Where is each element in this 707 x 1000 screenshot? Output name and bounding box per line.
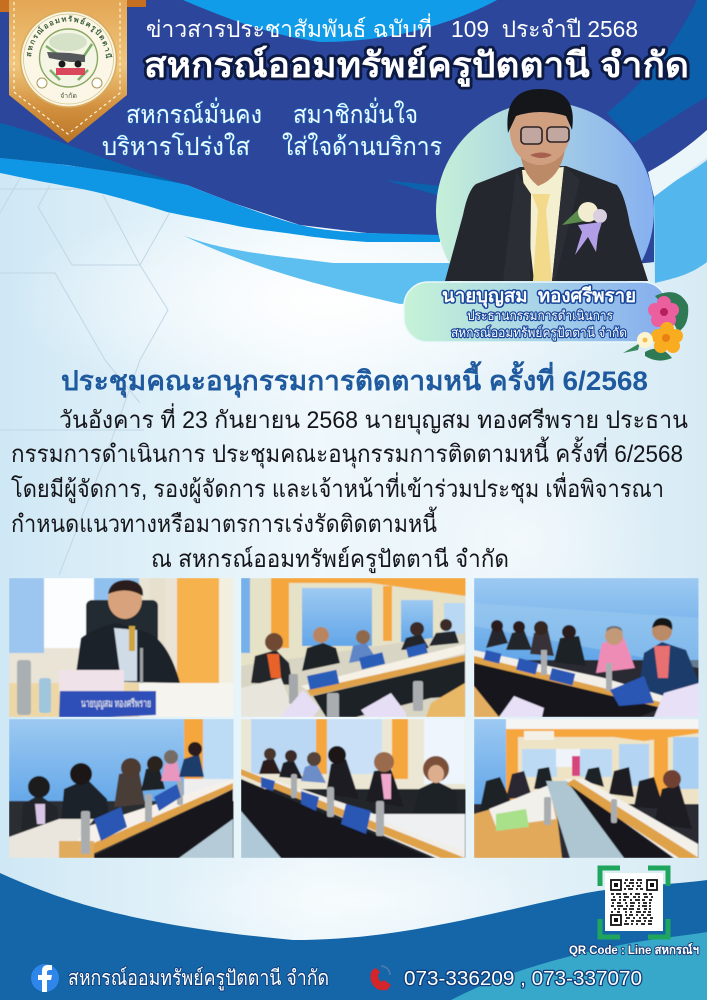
logo ring text: สหกรณ์ออมทรัพย์ครูปัตตานี [26, 15, 112, 58]
wave: right white swoosh [648, 130, 707, 197]
photo: wide view of meeting room [474, 719, 699, 858]
chairman position: ประธานกรรมการดำเนินการ [467, 308, 613, 323]
wave: teal footer corner [451, 932, 707, 1000]
photo: staff along the table [9, 719, 234, 858]
decorative hexagon lines [0, 178, 170, 575]
slogans: สหกรณ์มั่นคง [126, 97, 262, 129]
QR code [600, 868, 668, 937]
newsletter issue line: ข่าวสารประชาสัมพันธ์ ฉบับที่ 109 ประจำปี 2568 [146, 13, 638, 42]
wave: small dark accent behind portrait [385, 180, 440, 196]
logo bottom word: จำกัด [60, 92, 77, 100]
organisation title: สหกรณ์ออมทรัพย์ครูปัตตานี จำกัด [144, 45, 689, 87]
wave: mid blue left [0, 123, 187, 185]
corsage [562, 202, 607, 255]
name card: นายบุญสม ทองศรีพราย [81, 697, 151, 710]
news heading: ประชุมคณะอนุกรรมการติดตามหนี้ ครั้งที่ 6/2568 [61, 360, 648, 398]
wave: bright blue top swoosh [183, 0, 497, 42]
name card [59, 691, 156, 717]
slogans: บริหารโปร่งใส [102, 132, 250, 161]
photo: chairman at microphone [9, 578, 234, 717]
slogans: สมาชิกมั่นใจ [293, 97, 418, 129]
portrait: chairman [436, 89, 654, 320]
news body text [11, 403, 688, 574]
icon: facebook [31, 964, 59, 992]
news body text: โดยมีผู้จัดการ, รองผู้จัดการ และเจ้าหน้าที่เข้าร่วมประชุม เพื่อพิจารณา [11, 472, 664, 504]
chairman name: นายบุญสม ทองศรีพราย [442, 285, 636, 308]
top dark blue field [0, 0, 707, 264]
chairman organisation: สหกรณ์ออมทรัพย์ครูปัตตานี จำกัด [451, 325, 627, 341]
wave: light blue swoosh [182, 235, 450, 304]
ribbon badge with cooperative logo [0, 0, 146, 143]
photo: meeting table right side [474, 578, 699, 717]
slogans: ใส่ใจด้านบริการ [282, 132, 442, 161]
news body text: ณ สหกรณ์ออมทรัพย์ครูปัตตานี จำกัด [151, 545, 509, 574]
QR caption: QR Code : Line สหกรณ์ฯ [569, 943, 699, 957]
photo: staff writing notes [241, 719, 466, 858]
news body text: วันอังคาร ที่ 23 กันยายน 2568 นายบุญสม ทองศรีพราย ประธาน [59, 403, 688, 435]
photo: meeting room left side [241, 578, 466, 723]
name plate [404, 282, 667, 342]
facebook page name: สหกรณ์ออมทรัพย์ครูปัตตานี จำกัด [68, 966, 329, 991]
icon: tropical flowers [623, 292, 688, 361]
slogans [102, 97, 442, 161]
wave: right light blue [654, 160, 707, 283]
wave: dark blue footer [0, 873, 707, 1000]
news body text: กำหนดแนวทางหรือมาตรการเร่งรัดติดตามหนี้ [11, 506, 437, 538]
phone numbers: 073-336209 , 073-337070 [404, 968, 642, 990]
wave: mid blue band upper right [607, 0, 707, 143]
wave: bright blue band [0, 158, 440, 242]
icon: telephone [370, 966, 391, 990]
